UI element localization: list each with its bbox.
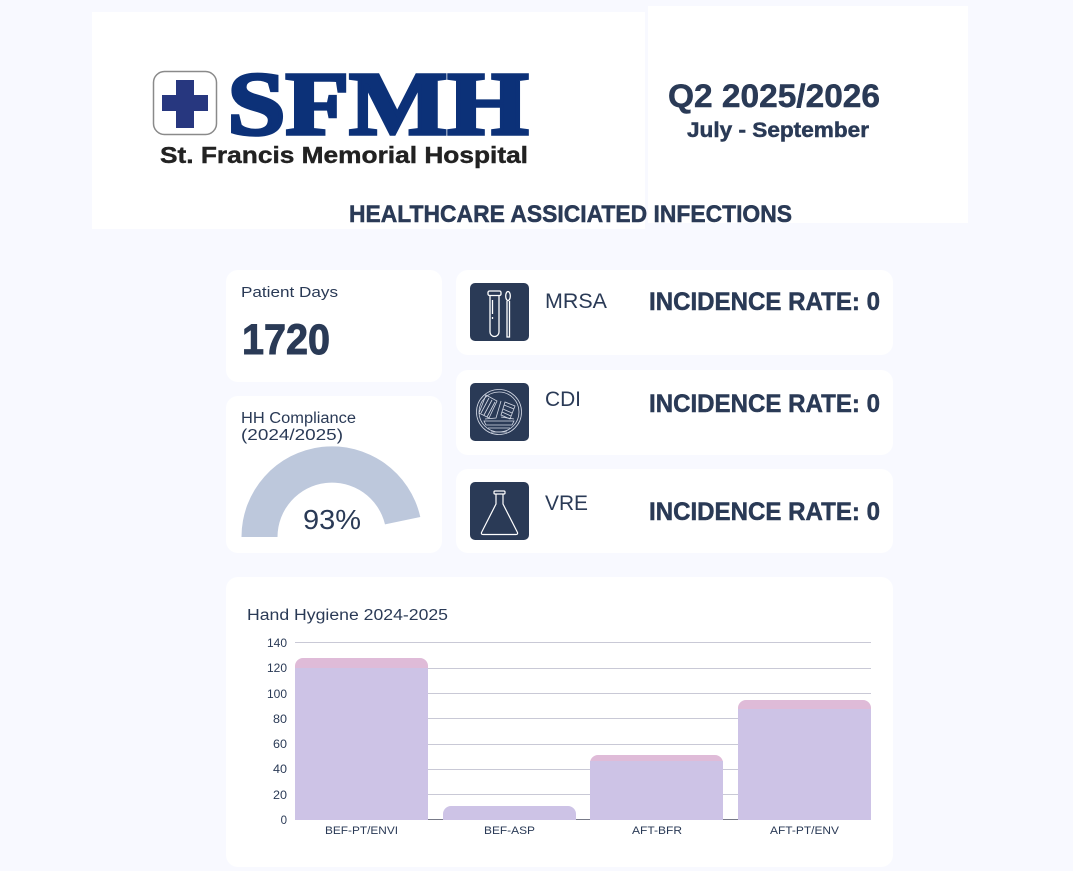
y axis labels: 0	[281, 815, 287, 827]
patient days label: Patient Days	[241, 284, 338, 301]
MRSA incidence rate: INCIDENCE RATE: 0	[649, 288, 880, 316]
y axis labels: 140	[267, 638, 287, 650]
bar chart	[267, 638, 871, 837]
panel: MRSA	[456, 270, 893, 355]
panel: logo header	[92, 12, 645, 229]
x axis labels: AFT-BFR	[632, 825, 682, 837]
y axis labels: 20	[273, 790, 287, 802]
x axis labels: BEF-ASP	[484, 825, 535, 837]
y axis labels: 80	[273, 714, 287, 726]
x axis labels: AFT-PT/ENV	[770, 825, 840, 837]
panel: patient days	[226, 270, 442, 382]
chart title: Hand Hygiene 2024-2025	[247, 607, 448, 624]
compliance label: (2024/2025)	[241, 427, 343, 444]
bar: AFT-BFR	[590, 755, 723, 820]
y axis labels	[267, 638, 287, 827]
panel: CDI	[456, 370, 893, 455]
y axis labels: 60	[273, 739, 287, 751]
gauge value: 93%	[303, 504, 361, 535]
gauge chart	[241, 446, 420, 537]
CDI label: CDI	[545, 388, 581, 411]
x axis labels	[325, 825, 840, 837]
bar: BEF-PT/ENVI	[295, 658, 428, 820]
date range: July - September	[687, 118, 870, 142]
MRSA label: MRSA	[545, 290, 607, 313]
panel: hand hygiene compliance	[226, 396, 442, 553]
patient days value: 1720	[242, 316, 330, 364]
icon: petri dish	[470, 383, 529, 441]
icon: flask	[470, 482, 529, 540]
y axis labels: 40	[273, 764, 287, 776]
panel: hand hygiene chart	[226, 577, 893, 867]
compliance label: HH Compliance	[241, 410, 356, 427]
icon: medical cross	[154, 72, 216, 134]
logo: SFMH St. Francis Memorial Hospital: St. Francis Memorial Hospital	[160, 142, 528, 168]
panel: VRE	[456, 469, 893, 553]
icon: test tube and swab	[470, 283, 529, 341]
title: HEALTHCARE ASSICIATED INFECTIONS	[349, 201, 792, 228]
y axis labels: 100	[267, 689, 287, 701]
compliance label	[241, 410, 356, 444]
CDI incidence rate: INCIDENCE RATE: 0	[649, 390, 880, 418]
quarter heading: Q2 2025/2026	[668, 78, 880, 114]
y axis labels: 120	[267, 663, 287, 675]
bar: BEF-ASP	[443, 806, 576, 820]
logo: SFMH St. Francis Memorial Hospital: SFMH	[228, 55, 528, 154]
VRE label: VRE	[545, 492, 588, 515]
logo: SFMH St. Francis Memorial Hospital	[154, 55, 528, 168]
bar: AFT-PT/ENV	[738, 700, 871, 820]
x axis labels: BEF-PT/ENVI	[325, 825, 398, 837]
VRE incidence rate: INCIDENCE RATE: 0	[649, 498, 880, 526]
panel: quarter header	[648, 6, 968, 223]
